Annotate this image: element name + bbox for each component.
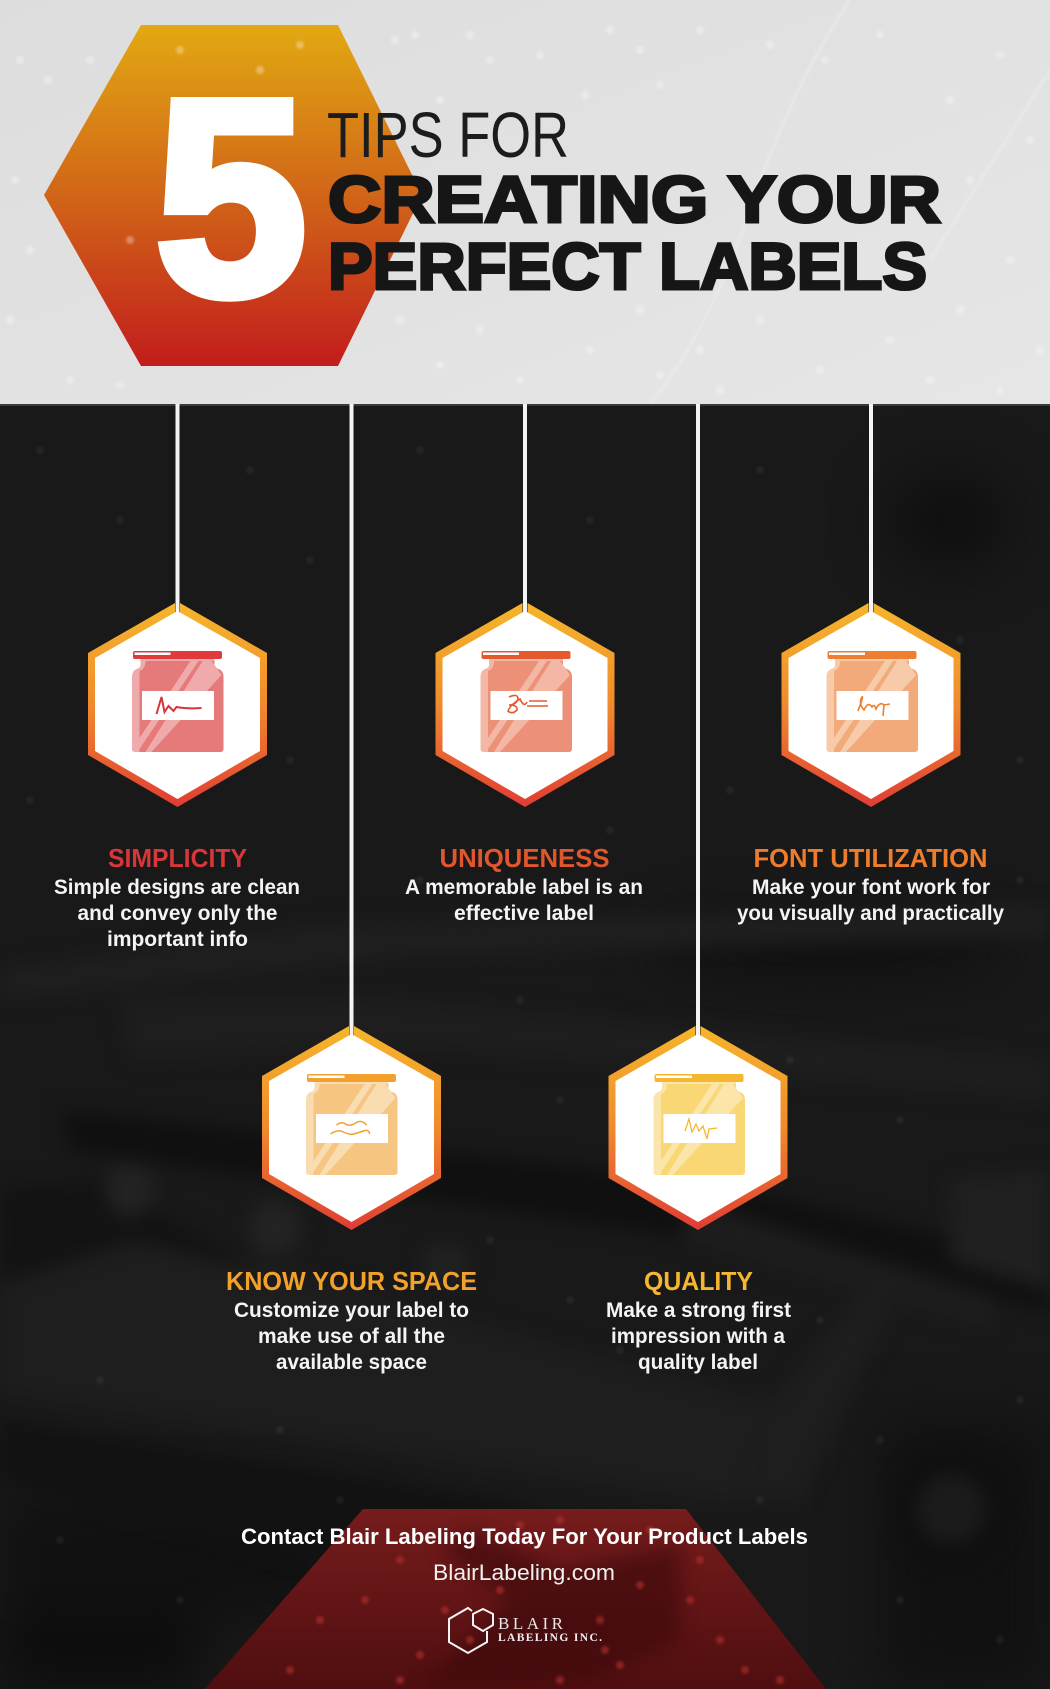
title: TIPS FOR — [327, 99, 569, 171]
text: know your space description: available space — [276, 1351, 427, 1374]
website: BlairLabeling.com — [433, 1560, 615, 1585]
text: font utilization description: you visually and practically — [737, 902, 1004, 925]
logo: Blair Labeling Inc. — [449, 1608, 602, 1653]
icon: large gradient hexagon — [44, 25, 422, 366]
text: know your space description: Customize your label to — [234, 1299, 469, 1322]
icon: uniqueness jar in hexagon — [436, 603, 614, 807]
text: font utilization description — [737, 876, 1004, 925]
text: know your space description — [234, 1299, 469, 1374]
text: quality description — [606, 1299, 791, 1374]
heading: uniqueness: UNIQUENESS — [440, 843, 610, 873]
heading: quality: QUALITY — [644, 1266, 753, 1296]
tip 1: simplicity — [54, 603, 300, 951]
logo: Blair Labeling Inc.: BLAIR — [498, 1614, 564, 1633]
icon: font utilization jar in hexagon — [782, 603, 960, 807]
title: PERFECT LABELS — [328, 229, 927, 303]
text: simplicity description — [54, 876, 300, 951]
text: quality description: Make a strong first — [606, 1299, 791, 1322]
title: CREATING YOUR — [328, 162, 941, 236]
header speckle texture — [10, 30, 1040, 390]
heading: simplicity: SIMPLICITY — [108, 843, 247, 873]
tip 4: know your space — [226, 1026, 477, 1374]
tip 3: font utilization — [737, 603, 1004, 925]
text: quality description: impression with a — [611, 1325, 785, 1348]
text: uniqueness description: effective label — [454, 902, 594, 925]
panel: header background — [0, 0, 1050, 404]
text: quality description: quality label — [638, 1351, 758, 1374]
heading: know your space: KNOW YOUR SPACE — [226, 1266, 477, 1296]
tip 2: uniqueness — [405, 603, 643, 925]
text: font utilization description: Make your font work for — [752, 876, 990, 899]
icon: logo hexagons — [449, 1608, 493, 1653]
heading: font utilization: FONT UTILIZATION — [754, 843, 988, 873]
panel: red hexagon footer shape — [205, 1509, 826, 1689]
text: uniqueness description — [405, 876, 643, 925]
panel: dark photo background — [0, 404, 1050, 1689]
text: uniqueness description: A memorable label is an — [405, 876, 643, 899]
title number 5: 5 — [155, 42, 307, 354]
icon: simplicity jar in hexagon — [88, 603, 267, 807]
call to action: Contact Blair Labeling Today For Your Product Labels — [241, 1524, 808, 1549]
title — [327, 99, 941, 303]
connector lines — [176, 404, 873, 1036]
logo: Blair Labeling Inc.: LABELING INC. — [498, 1632, 602, 1644]
icon: know your space jar in hexagon — [262, 1026, 441, 1230]
text: simplicity description: Simple designs are clean — [54, 876, 300, 899]
text: simplicity description: important info — [107, 928, 248, 951]
tip 5: quality — [606, 1026, 791, 1374]
text: simplicity description: and convey only the — [78, 902, 278, 925]
icon: quality jar in hexagon — [608, 1026, 788, 1230]
text: know your space description: make use of all the — [258, 1325, 445, 1348]
